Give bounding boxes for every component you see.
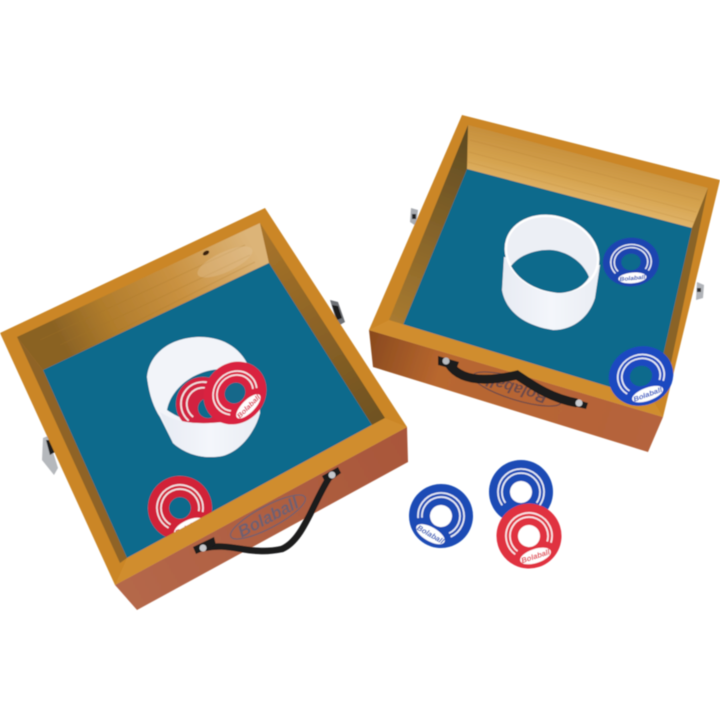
right box cylinder target: [496, 204, 608, 330]
latch: right side of left box: [330, 300, 345, 326]
left box back wall: [17, 223, 269, 370]
left game box: [0, 208, 408, 610]
loose blue washer back: [489, 460, 553, 524]
latch: left box left side: [42, 436, 58, 475]
right box logo on side: Bolaball: [484, 371, 549, 406]
blue washer on right box felt: [601, 235, 661, 289]
left box right wall: [260, 223, 385, 425]
right box felt floor: [403, 169, 692, 400]
right box handle strap: [438, 356, 588, 409]
right box front rim: [369, 320, 663, 417]
loose red washer: Bolaball: [520, 547, 552, 565]
left box logo on side: [226, 488, 310, 546]
right box rim: [369, 115, 720, 417]
latch: right box left side: [410, 208, 418, 226]
blue washer on right box felt: Bolaball: [619, 274, 646, 283]
right box front side: [369, 330, 663, 452]
left box handle strap: [193, 467, 341, 554]
loose blue washer left: [397, 472, 485, 560]
right box logo on side: [470, 365, 564, 413]
blue washer on right box rim: [600, 337, 682, 415]
blue washer on right box rim: Bolaball: [632, 385, 664, 404]
left box rim: [0, 208, 407, 585]
right game box: [369, 115, 720, 452]
right box left wall: [389, 125, 468, 325]
red washer on cylinder edge: Bolaball: [235, 392, 263, 420]
left box logo on side: Bolaball: [235, 493, 303, 541]
red washer on left box felt: Bolaball: [174, 517, 205, 538]
loose washers: [397, 460, 570, 577]
left box front rim: [115, 418, 407, 585]
loose red washer: [488, 495, 570, 577]
right box right wall: [653, 188, 708, 400]
knot in the wood: [202, 250, 210, 256]
loose blue washer left: Bolaball: [415, 523, 446, 546]
red washer inside cylinder: [172, 373, 234, 435]
latch: right box right side: [696, 282, 704, 300]
left box front side: [115, 427, 408, 610]
left box felt floor: [43, 263, 372, 558]
red washer on left box felt: [137, 465, 223, 551]
left box left wall: [17, 337, 127, 563]
right box back wall: [467, 125, 708, 228]
left box cylinder target: [147, 337, 279, 457]
